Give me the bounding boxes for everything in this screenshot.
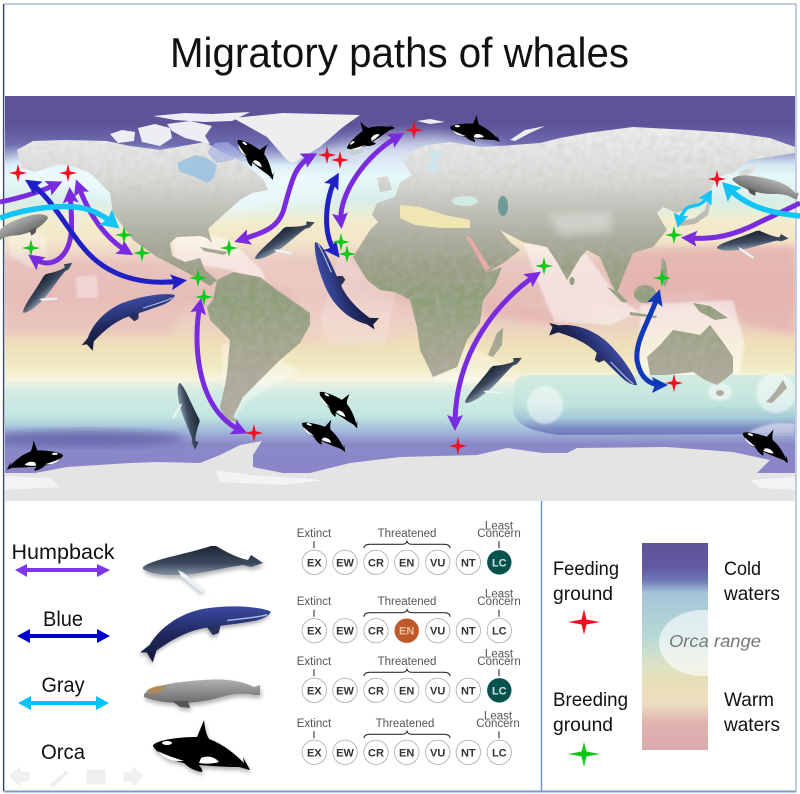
orca: south atlantic lower [297, 411, 354, 453]
gray whale image [144, 679, 260, 708]
status row: orca: NT [461, 747, 476, 759]
orca: south atlantic upper [313, 381, 370, 429]
status row: orca: VU [430, 747, 445, 759]
light mountain patch [548, 212, 612, 236]
status row: gray: EW [336, 685, 354, 697]
status row: orca: CR [368, 747, 384, 759]
cold label line 2: waters [723, 583, 780, 605]
status row: blue: CR [368, 626, 384, 638]
blue whale: indian ocean [543, 301, 640, 409]
status row: orca: Least [484, 710, 513, 722]
status row: humpback [297, 520, 521, 574]
feeding star [568, 609, 600, 635]
arctic islands [110, 112, 545, 146]
status row: blue: Least [485, 589, 514, 601]
land: eurasia and africa [353, 127, 795, 377]
orca: north atlantic [339, 107, 396, 159]
antarctica [5, 441, 795, 501]
red sea [465, 235, 490, 272]
status row: orca: Concern [476, 718, 520, 730]
breeding ground label line 2: ground [553, 714, 613, 736]
gray whale: okhotsk [730, 168, 800, 208]
status row: blue: EN [399, 626, 414, 638]
arrow: humpback north pacific to feeding ground [0, 184, 57, 202]
arrow: blue atlantic [327, 178, 336, 253]
breeding star [568, 742, 600, 767]
blue whale: atlantic [311, 231, 382, 340]
status row: blue: EW [336, 626, 354, 638]
status row: orca: EW [336, 747, 354, 759]
arrow: humpback hawaii [33, 193, 72, 263]
panel: species legend [12, 541, 271, 772]
status row: humpback: LC [492, 557, 507, 569]
arrow: blue australia [637, 295, 662, 385]
arrow: humpback south america [197, 304, 242, 431]
status row: humpback: Least [485, 520, 514, 532]
arrow: blue pacific [30, 183, 181, 282]
status row: gray: Extinct [297, 656, 332, 668]
status row: humpback: Threatened [378, 528, 436, 540]
left dark band [0, 430, 185, 446]
orca: south pacific [7, 440, 63, 471]
humpback: hawaii [15, 256, 84, 323]
status row: gray: Threatened [378, 656, 436, 668]
antarctic ice shelves [5, 470, 795, 490]
panel: map key [553, 543, 780, 767]
warm label: Warm [724, 689, 774, 711]
southern indian teal band [513, 375, 795, 435]
feeding ground label line 2: ground [553, 583, 613, 605]
breeding ground stars [22, 226, 683, 306]
orca: new zealand south [738, 420, 797, 464]
orca image [153, 720, 250, 772]
kerguelen and islands halos [527, 373, 796, 435]
status row: gray: CR [368, 685, 384, 697]
orca range patch [659, 610, 708, 676]
pale coastal zones [10, 225, 745, 420]
status row: orca: Extinct [297, 718, 332, 730]
humpback image [143, 546, 263, 592]
land: north america [17, 140, 268, 286]
caspian [498, 196, 508, 216]
arctic pale halo [5, 135, 500, 225]
gray label: Gray [42, 674, 85, 697]
arrow: humpback north atlantic [240, 156, 312, 240]
temperature colour bar [642, 543, 708, 750]
status row: humpback: Extinct [297, 528, 332, 540]
arrow: humpback california [78, 185, 128, 252]
arrow: humpback indian ocean [455, 275, 536, 425]
humpback: east of japan [716, 228, 790, 262]
arrow: gray east pacific to okhotsk [727, 187, 800, 216]
humpback: chile [166, 381, 205, 453]
humpback: madagascar [458, 349, 532, 414]
blue whale: pacific [75, 291, 182, 353]
panel: world map [0, 96, 796, 501]
orca range label: Orca range [669, 631, 761, 651]
status row: humpback: CR [368, 557, 384, 569]
status row: gray: Concern [477, 656, 521, 668]
status row: gray: EX [307, 685, 322, 697]
status row: blue: VU [430, 626, 445, 638]
arrow: humpback east atlantic [341, 136, 399, 223]
status row: gray: Least [485, 648, 514, 660]
greenland [233, 113, 360, 163]
status row: orca: EX [307, 747, 322, 759]
status row: humpback: EX [307, 557, 322, 569]
black sea [452, 196, 478, 206]
orca: norway [450, 114, 501, 143]
humpback label: Humpback [12, 541, 115, 564]
baltic [425, 150, 443, 172]
land masses [17, 127, 795, 422]
arrow: humpback west pacific [687, 203, 800, 238]
status row: blue: Extinct [297, 596, 332, 608]
status row: orca: EN [399, 747, 414, 759]
gray arrow [18, 696, 109, 710]
status row: gray: VU [430, 685, 445, 697]
status row: humpback: VU [430, 557, 445, 569]
tropical pink patches [5, 245, 795, 345]
breeding ground label: Breeding [553, 689, 628, 711]
land: smaller islands [200, 160, 787, 403]
humpback arrow [15, 564, 110, 577]
cold label: Cold [724, 558, 761, 580]
orca label: Orca [41, 741, 85, 764]
status row: humpback: NT [461, 557, 476, 569]
status row: gray: EN [399, 685, 414, 697]
mediterranean [400, 205, 470, 228]
blue arrow [17, 629, 110, 643]
warm label line 2: waters [723, 714, 780, 736]
iceland [346, 148, 364, 156]
status row: blue: NT [461, 626, 476, 638]
blue whale image [140, 606, 271, 662]
land: south america [207, 272, 310, 422]
feeding ground stars [9, 121, 726, 455]
arrow: gray pacific [0, 207, 114, 224]
status row: humpback: EN [399, 557, 414, 569]
map whales [0, 107, 800, 471]
status row: humpback: EW [336, 557, 354, 569]
status row: orca [297, 710, 520, 764]
status row: gray [297, 648, 521, 702]
status row: blue: Concern [477, 596, 521, 608]
status row: blue [297, 589, 521, 643]
gray whale: west pacific edge [0, 206, 52, 252]
status row: gray: LC [492, 685, 507, 697]
arrow: gray japan [679, 195, 709, 222]
status row: orca: Threatened [376, 718, 434, 730]
title: Migratory paths of whales [170, 29, 629, 76]
humpback: caribbean [249, 214, 323, 271]
orca: greenland [230, 129, 288, 181]
panel: conservation status [297, 520, 521, 764]
foxe basin [207, 142, 240, 163]
status row: humpback: Concern [477, 528, 521, 540]
status row: blue: LC [492, 626, 507, 638]
status row: orca: LC [492, 747, 507, 759]
feeding ground label: Feeding [553, 558, 619, 580]
status row: gray: NT [461, 685, 476, 697]
blue label: Blue [43, 608, 83, 631]
status row: blue: Threatened [378, 596, 436, 608]
status row: blue: EX [307, 626, 322, 638]
hudson bay [177, 155, 217, 183]
migration arrows [0, 136, 800, 431]
nav icons [10, 767, 143, 787]
